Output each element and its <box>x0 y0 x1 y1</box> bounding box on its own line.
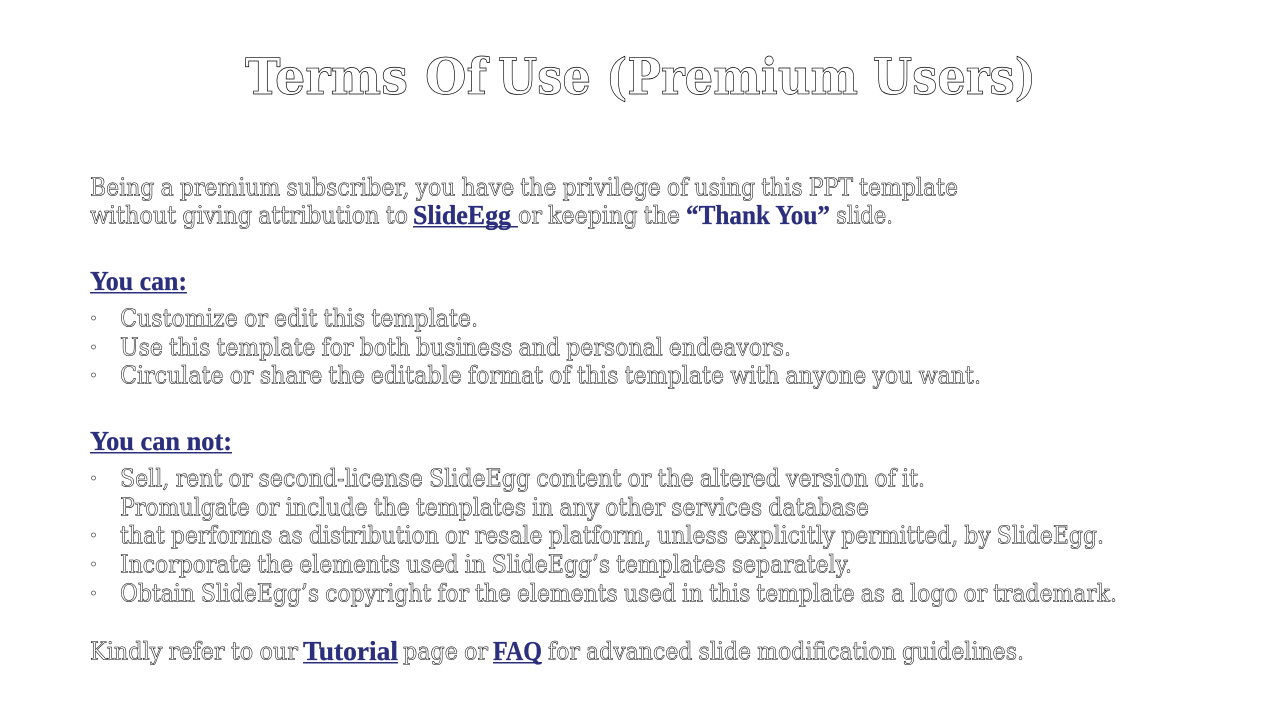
heading: you can: You can: <box>90 266 187 296</box>
title: Use <box>498 47 591 106</box>
list: permitted uses: Use this template for both business and personal endeavors. <box>120 333 791 361</box>
title: Users) <box>873 47 1036 106</box>
title: (Premium <box>606 47 858 106</box>
list: permitted uses <box>92 304 981 389</box>
text block: closing note <box>90 636 1024 666</box>
text block: introduction: or keeping the <box>518 202 680 230</box>
list: permitted uses: Circulate or share the editable format of this template with anyone you want. <box>120 361 981 389</box>
title: Of <box>425 47 490 106</box>
list: prohibited uses: Sell, rent or second-license SlideEgg content or the altered version of it. <box>120 464 925 492</box>
text block: closing note: FAQ <box>493 636 542 666</box>
text block: closing note: page or <box>403 637 488 665</box>
text block: introduction: SlideEgg <box>413 200 511 230</box>
heading: you can not: You can not: <box>90 426 232 456</box>
text block: closing note: for advanced slide modification guidelines. <box>548 637 1024 665</box>
text block: closing note: Kindly refer to our <box>90 637 298 665</box>
list: prohibited uses: Promulgate or include the templates in any other services database <box>120 493 869 521</box>
list: prohibited uses <box>92 464 1117 607</box>
text block: introduction: slide. <box>836 202 893 230</box>
list: prohibited uses: that performs as distribution or resale platform, unless explicitly permitted, by SlideEgg. <box>120 521 1104 549</box>
list: permitted uses: Customize or edit this template. <box>120 304 478 332</box>
text block: introduction: Being a premium subscriber, you have the privilege of using this PPT template <box>90 173 958 201</box>
text block: closing note: Tutorial <box>303 636 398 666</box>
text block: introduction <box>90 173 958 230</box>
title: Terms <box>245 47 408 106</box>
text block: introduction: without giving attribution to <box>90 202 408 230</box>
title <box>245 47 1036 106</box>
text block: introduction: “Thank You” <box>686 200 830 230</box>
list: prohibited uses: Obtain SlideEgg’s copyright for the elements used in this template as a logo or trademark. <box>120 579 1117 607</box>
list: prohibited uses: Incorporate the elements used in SlideEgg’s templates separately. <box>120 550 852 578</box>
